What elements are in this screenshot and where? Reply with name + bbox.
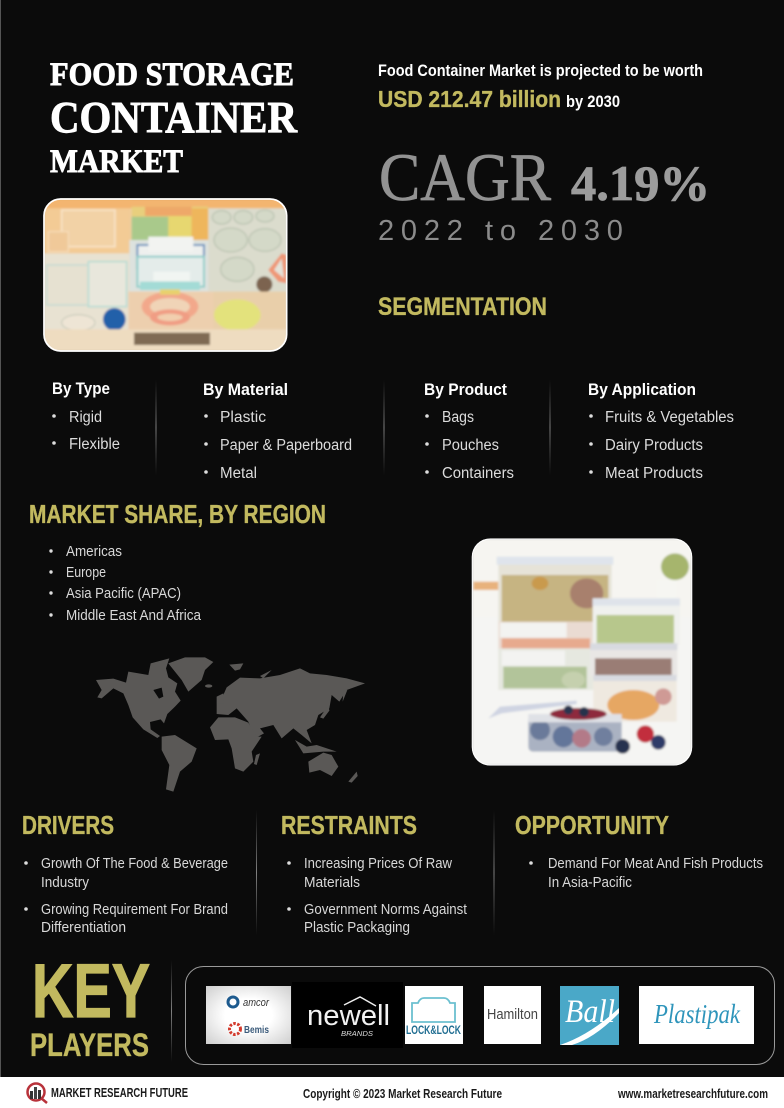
market size statement: Food Container Market is projected to be worth xyxy=(378,62,703,80)
logo: Market Research Future xyxy=(28,1084,188,1103)
panel: drivers: Industry xyxy=(41,875,90,891)
panel: opportunity: Demand For Meat And Fish Products xyxy=(548,856,763,872)
segment: by material: Plastic xyxy=(220,409,266,426)
footer xyxy=(0,1077,784,1108)
panel: restraints xyxy=(281,812,467,936)
logo: Hamilton: Hamilton xyxy=(487,1006,538,1023)
panel: restraints: Increasing Prices Of Raw xyxy=(304,856,452,872)
region list: Middle East And Africa xyxy=(66,608,202,624)
logo: Ball: Ball xyxy=(565,994,615,1030)
title: CONTAINER xyxy=(50,93,298,142)
logo: amcor and Bemis: amcor xyxy=(243,997,270,1009)
panel: drivers: Growing Requirement For Brand xyxy=(41,902,228,918)
logo: Plastipak: Plastipak xyxy=(653,999,741,1029)
panel: key player logos xyxy=(186,966,774,1064)
market size statement: by 2030 xyxy=(566,93,620,111)
panel: restraints: RESTRAINTS xyxy=(281,812,417,840)
logo: amcor and Bemis xyxy=(206,986,291,1044)
panel: drivers: Differentiation xyxy=(41,920,126,936)
panel: drivers: DRIVERS xyxy=(22,812,114,840)
CAGR figure xyxy=(378,139,710,247)
CAGR figure: 2030 xyxy=(538,215,630,247)
segment: by product: By Product xyxy=(424,380,507,399)
panel: opportunity xyxy=(515,812,763,891)
region list xyxy=(49,544,202,624)
title: FOOD STORAGE xyxy=(50,57,294,93)
segment: by type: By Type xyxy=(52,379,110,398)
logo: amcor and Bemis: Bemis xyxy=(244,1024,269,1036)
heading: key players xyxy=(30,949,150,1063)
heading: key players: KEY xyxy=(32,949,150,1034)
segment: by type: Flexible xyxy=(69,436,120,453)
logo: newell brands: BRANDS xyxy=(341,1031,373,1038)
market size statement xyxy=(378,62,703,112)
logo: Plastipak xyxy=(639,986,754,1044)
segment: by product: Bags xyxy=(442,409,474,426)
segment: by application: Meat Products xyxy=(605,465,703,482)
segment: by material: Paper & Paperboard xyxy=(220,437,352,454)
logo: newell brands: newell xyxy=(307,1000,390,1032)
segment: by application: Fruits & Vegetables xyxy=(605,409,734,426)
logo: Market Research Future: MARKET RESEARCH FUTURE xyxy=(51,1086,188,1100)
logo: Ball xyxy=(560,986,619,1045)
segment: by application: Dairy Products xyxy=(605,437,703,454)
heading: market share by region: MARKET SHARE, BY REGION xyxy=(29,501,326,529)
heading: segmentation: SEGMENTATION xyxy=(378,293,547,321)
segment: by material xyxy=(203,380,352,482)
region list: Americas xyxy=(66,544,122,560)
photo: stacked containers xyxy=(472,538,692,766)
logo: Lock and Lock: LOCK&LOCK xyxy=(406,1025,462,1037)
segment: by type xyxy=(52,379,120,453)
panel: drivers: Growth Of The Food & Beverage xyxy=(41,856,228,872)
segment: by material: Metal xyxy=(220,465,257,482)
heading: key players: PLAYERS xyxy=(30,1027,149,1063)
segment: by type: Rigid xyxy=(69,409,102,426)
photo: food storage drawer xyxy=(43,198,287,352)
segment: by product xyxy=(424,380,514,482)
panel: opportunity: In Asia-Pacific xyxy=(548,875,632,891)
segment: by product: Pouches xyxy=(442,437,499,454)
CAGR figure: CAGR xyxy=(379,139,552,215)
segment: by application: By Application xyxy=(588,380,696,399)
region list: Asia Pacific (APAC) xyxy=(66,586,181,602)
world map xyxy=(96,657,365,792)
panel: restraints: Plastic Packaging xyxy=(304,920,410,936)
logo: Lock and Lock xyxy=(405,986,463,1044)
panel: restraints: Materials xyxy=(304,875,360,891)
panel: restraints: Government Norms Against xyxy=(304,902,467,918)
title: MARKET xyxy=(50,144,183,180)
segment: by material: By Material xyxy=(203,380,288,399)
panel: drivers xyxy=(22,812,228,936)
logo: Hamilton xyxy=(484,986,541,1044)
CAGR figure: to xyxy=(485,215,523,247)
segment: by product: Containers xyxy=(442,465,514,482)
region list: Europe xyxy=(66,565,106,581)
segment: by application xyxy=(588,380,734,482)
logo: newell brands xyxy=(292,982,403,1048)
market size statement: USD 212.47 billion xyxy=(378,86,561,112)
CAGR figure: 4.19% xyxy=(571,155,710,211)
title xyxy=(50,57,298,180)
panel: opportunity: OPPORTUNITY xyxy=(515,812,669,840)
CAGR figure: 2022 xyxy=(378,215,470,247)
footer: Copyright © 2023 Market Research Future xyxy=(303,1087,502,1101)
